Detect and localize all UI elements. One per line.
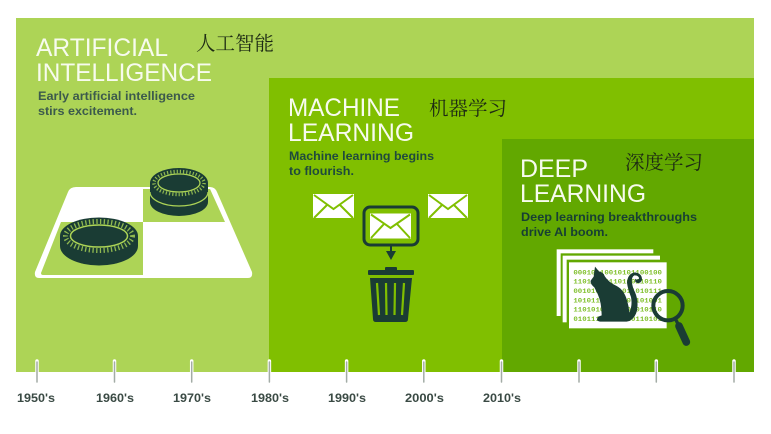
binary digits: 00010110010101100100 xyxy=(573,268,662,276)
checker: stacked pair xyxy=(150,168,208,216)
chinese label: 机器学习: 机器学习 xyxy=(429,93,507,121)
text: machine learning description xyxy=(289,151,434,178)
heading: deep learning: DEEP xyxy=(520,155,588,183)
decade labels: 1960's xyxy=(96,391,134,405)
text: machine learning description: to flourish. xyxy=(289,166,354,178)
back sheets xyxy=(557,249,667,328)
heading: deep learning: LEARNING xyxy=(520,180,646,208)
icon: checkers board xyxy=(35,168,252,278)
arrow: into trash xyxy=(386,246,396,260)
heading: machine learning: LEARNING xyxy=(288,119,414,147)
text: early AI description: Early artificial intelligence xyxy=(38,91,195,103)
heading: artificial intelligence: INTELLIGENCE xyxy=(36,59,212,87)
decade labels: 2010's xyxy=(483,391,521,405)
text: early AI description: stirs excitement. xyxy=(38,106,137,118)
cat silhouette xyxy=(591,267,642,322)
icon: trash can xyxy=(368,267,414,322)
heading: deep learning xyxy=(520,155,646,208)
panel: artificial intelligence xyxy=(16,18,754,372)
icon: data sheets with cat and magnifier xyxy=(557,249,686,342)
binary digits: 11010110110100110110 xyxy=(573,278,662,286)
text: machine learning description: Machine learning begins xyxy=(289,151,434,163)
text: early AI description xyxy=(38,91,195,118)
tick marks xyxy=(37,361,734,382)
text: deep learning description: Deep learning breakthroughs xyxy=(521,212,697,224)
heading: machine learning: MACHINE xyxy=(288,94,400,122)
magnifier xyxy=(653,291,686,342)
heading: machine learning xyxy=(288,94,414,147)
chinese label: 人工智能: 人工智能 xyxy=(196,28,274,56)
icon: right envelope xyxy=(428,194,468,218)
heading: artificial intelligence: ARTIFICIAL xyxy=(36,34,168,62)
timeline xyxy=(17,361,734,405)
icon: selected envelope in box xyxy=(364,207,418,245)
decade labels: 2000's xyxy=(405,391,444,405)
decade labels xyxy=(17,391,521,405)
chinese label: 深度学习: 深度学习 xyxy=(625,147,703,175)
checker: single xyxy=(60,218,138,266)
binary digits: 11010100101101010110 xyxy=(573,306,662,314)
text: deep learning description xyxy=(521,212,697,239)
binary digits xyxy=(573,268,662,323)
heading: artificial intelligence xyxy=(36,34,212,87)
binary digits: 00101011001011010111 xyxy=(573,287,662,295)
panel: deep learning xyxy=(502,139,754,372)
decade labels: 1950's xyxy=(17,391,55,405)
panel: machine learning xyxy=(269,78,754,372)
text: deep learning description: drive AI boom. xyxy=(521,227,608,239)
binary digits: 10101100110101101001 xyxy=(573,296,662,304)
binary digits: 01011100101010110101 xyxy=(573,315,662,323)
decade labels: 1980's xyxy=(251,391,289,405)
decade labels: 1990's xyxy=(328,391,366,405)
icon: left envelope xyxy=(313,194,354,218)
decade labels: 1970's xyxy=(173,391,211,405)
